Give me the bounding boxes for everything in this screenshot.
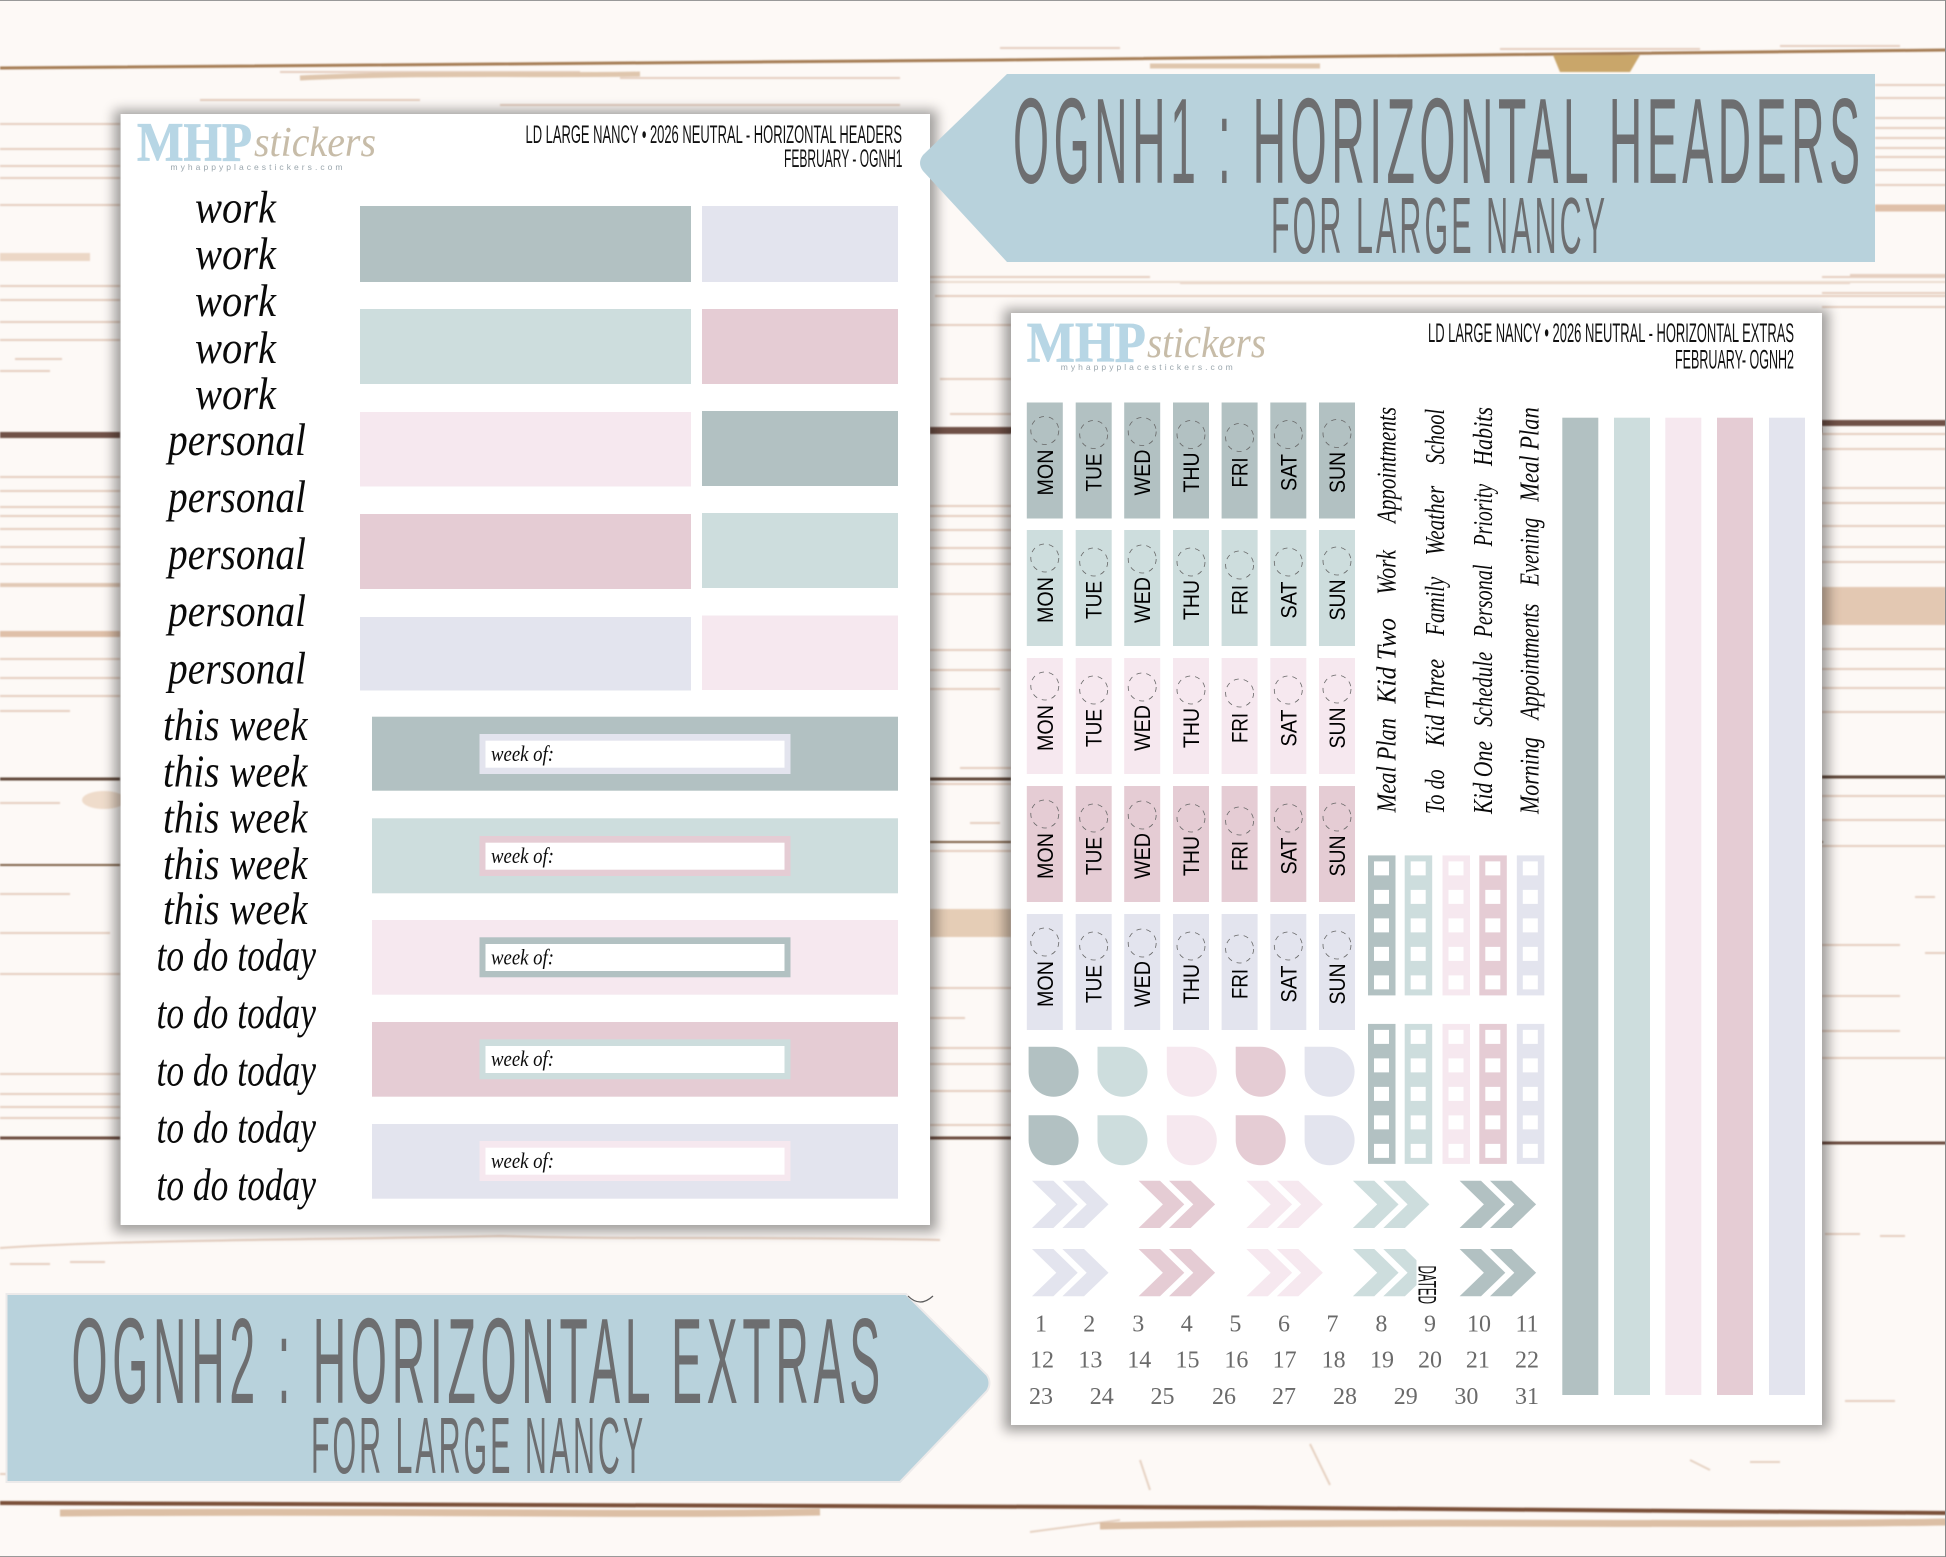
rotated script word labels: Priority bbox=[1468, 484, 1498, 547]
script labels column: work bbox=[195, 228, 277, 279]
sheet shadow: left sheet bbox=[114, 110, 937, 1232]
script labels column: personal bbox=[165, 642, 306, 694]
logo: MHP stickers: MHP bbox=[1027, 311, 1146, 374]
script labels column: work bbox=[195, 275, 277, 326]
script labels column: this week bbox=[163, 699, 309, 750]
weekday tabs: sage row bbox=[1027, 402, 1355, 518]
panel: OGNH2 horizontal extras sheet bbox=[1011, 311, 1822, 1425]
rotated script word labels: Schedule bbox=[1468, 652, 1498, 727]
date numbers: 7 bbox=[1326, 1312, 1338, 1338]
weekday tabs: rose row: FRI bbox=[1228, 841, 1253, 871]
rotated script word labels: Habits bbox=[1468, 407, 1498, 467]
logo: MHP stickers: myhappyplacestickers.com bbox=[170, 162, 342, 172]
teardrop stickers bbox=[1029, 1047, 1355, 1165]
rotated script word labels: Appointments bbox=[1372, 407, 1402, 525]
logo: MHP stickers: stickers bbox=[254, 120, 376, 166]
rotated script word labels: Appointments bbox=[1515, 604, 1545, 721]
banner: OGNH2 horizontal extras: FOR LARGE NANCY bbox=[311, 1400, 643, 1490]
rotated script word labels: Personal bbox=[1468, 564, 1498, 638]
date numbers: 30 bbox=[1454, 1384, 1478, 1410]
rotated script word labels: Meal Plan bbox=[1372, 718, 1402, 813]
weekday tabs: mint row: SAT bbox=[1276, 582, 1301, 618]
weekday tabs: rose row: THU bbox=[1179, 836, 1204, 876]
week of banners: week of: bbox=[491, 741, 554, 766]
week of banners: week of: bbox=[491, 944, 554, 970]
rotated script word labels: Meal Plan bbox=[1515, 407, 1545, 503]
weekday tabs: pink row: WED bbox=[1130, 705, 1155, 751]
rotated script word labels: Morning bbox=[1515, 737, 1545, 815]
rotated script word labels: School bbox=[1420, 409, 1450, 464]
weekday tabs: pink row bbox=[1027, 658, 1355, 774]
weekday tabs: lavender row: TUE bbox=[1082, 965, 1107, 1003]
date numbers: 2 bbox=[1083, 1312, 1095, 1338]
script labels column: personal bbox=[165, 528, 306, 579]
dated tag: DATED bbox=[1412, 1266, 1440, 1304]
script labels column: personal bbox=[165, 585, 306, 636]
weekday tabs: rose row: SUN bbox=[1325, 836, 1350, 876]
date numbers: 14 bbox=[1127, 1348, 1151, 1374]
date numbers: 5 bbox=[1229, 1312, 1241, 1338]
weekday tabs: pink row: SAT bbox=[1276, 710, 1301, 746]
script labels column: to do today bbox=[156, 1159, 316, 1210]
date numbers: 13 bbox=[1078, 1348, 1102, 1374]
sheet heading text: LD LARGE NANCY • 2026 NEUTRAL - HORIZONTAL HEADERS bbox=[526, 121, 902, 149]
weekday tabs: sage row: SUN bbox=[1325, 452, 1350, 493]
weekday tabs: lavender row: MON bbox=[1033, 961, 1058, 1007]
date numbers: 8 bbox=[1375, 1312, 1387, 1338]
date numbers: 25 bbox=[1150, 1384, 1174, 1410]
rotated script word labels: Kid One bbox=[1468, 741, 1498, 815]
weekday tabs: mint row: FRI bbox=[1228, 585, 1253, 615]
date numbers: 18 bbox=[1322, 1348, 1346, 1374]
weekday tabs: lavender row: SAT bbox=[1276, 966, 1301, 1002]
logo: MHP stickers: MHP bbox=[137, 112, 252, 172]
rotated script word labels: Weather bbox=[1420, 485, 1450, 555]
script labels column: this week bbox=[163, 792, 309, 842]
date numbers: 6 bbox=[1278, 1312, 1290, 1338]
date numbers: 11 bbox=[1515, 1312, 1539, 1338]
date numbers: 16 bbox=[1224, 1348, 1248, 1374]
script labels column: to do today bbox=[156, 1102, 316, 1152]
weekday tabs: mint row: SUN bbox=[1325, 580, 1350, 620]
banner: OGNH2 horizontal extras: OGNH2 : HORIZONTAL EXTRAS bbox=[72, 1292, 880, 1429]
script labels column: to do today bbox=[156, 987, 316, 1038]
date numbers: 3 bbox=[1132, 1312, 1144, 1338]
script labels column: this week bbox=[163, 746, 309, 796]
date numbers: 29 bbox=[1394, 1384, 1418, 1410]
script labels column: work bbox=[195, 322, 277, 373]
date numbers: 15 bbox=[1176, 1348, 1200, 1374]
week of banners bbox=[372, 717, 898, 1199]
date numbers: 20 bbox=[1418, 1348, 1442, 1374]
long vertical colour strips bbox=[1562, 418, 1805, 1395]
sheet shadow: right sheet bbox=[1004, 309, 1829, 1431]
panel: OGNH2 horizontal extras sheet: FEBRUARY- OGNH2 bbox=[1675, 344, 1794, 374]
date numbers: 28 bbox=[1333, 1384, 1357, 1410]
date numbers: 24 bbox=[1090, 1384, 1114, 1410]
weekday tabs: mint row: MON bbox=[1033, 577, 1058, 623]
logo: MHP stickers bbox=[1027, 311, 1266, 374]
panel: OGNH1 horizontal headers sheet: FEBRUARY - OGNH1 bbox=[784, 145, 902, 173]
week of banners: week of: bbox=[491, 1148, 554, 1173]
weekday tabs: lavender row: SUN bbox=[1325, 964, 1350, 1004]
date numbers: 1 bbox=[1035, 1312, 1047, 1338]
sheet heading text bbox=[1428, 318, 1794, 374]
date numbers: 9 bbox=[1424, 1312, 1436, 1338]
script labels column: work bbox=[195, 368, 277, 419]
weekday tabs: sage row: THU bbox=[1179, 452, 1204, 492]
weekday tabs: rose row: MON bbox=[1033, 833, 1058, 879]
dated tag bbox=[1412, 1249, 1440, 1307]
date numbers: 22 bbox=[1515, 1348, 1539, 1374]
weekday tabs: pink row: SUN bbox=[1325, 708, 1350, 748]
date numbers: 31 bbox=[1515, 1384, 1539, 1410]
rotated script word labels bbox=[1372, 407, 1545, 815]
script labels column: personal bbox=[165, 471, 306, 522]
date numbers: 10 bbox=[1467, 1312, 1491, 1338]
weekday tabs: lavender row: THU bbox=[1179, 964, 1204, 1004]
panel: OGNH1 horizontal headers sheet bbox=[121, 112, 930, 1225]
date numbers: 12 bbox=[1030, 1348, 1054, 1374]
date numbers: 4 bbox=[1181, 1312, 1193, 1338]
date numbers: 27 bbox=[1272, 1384, 1296, 1410]
weekday tabs: sage row: FRI bbox=[1228, 458, 1253, 488]
logo: MHP stickers bbox=[137, 112, 376, 172]
habit tracker strips: top set bbox=[1368, 855, 1544, 995]
script labels column: personal bbox=[165, 414, 306, 465]
weekday tabs: rose row: SAT bbox=[1276, 838, 1301, 874]
weekday tabs: sage row: TUE bbox=[1082, 454, 1107, 492]
habit tracker strips: bottom set bbox=[1368, 1024, 1544, 1164]
week of banners: week of: bbox=[491, 843, 554, 868]
banner: OGNH1 horizontal headers: OGNH1 : HORIZONTAL HEADERS bbox=[1013, 72, 1860, 209]
script labels column: work bbox=[195, 182, 277, 232]
date numbers: 17 bbox=[1273, 1348, 1297, 1374]
weekday tabs: sage row: WED bbox=[1130, 450, 1155, 496]
weekday tabs: rose row bbox=[1027, 786, 1355, 902]
script labels column: this week bbox=[163, 838, 309, 889]
weekday tabs: pink row: THU bbox=[1179, 708, 1204, 748]
banner: OGNH1 horizontal headers: FOR LARGE NANCY bbox=[1271, 180, 1605, 270]
weekday tabs: mint row: WED bbox=[1130, 577, 1155, 623]
weekday tabs: mint row bbox=[1027, 530, 1355, 646]
rotated script word labels: Kid Three bbox=[1420, 659, 1450, 747]
weekday tabs: pink row: MON bbox=[1033, 705, 1058, 751]
script labels column: to do today bbox=[156, 930, 316, 980]
weekday tabs: rose row: WED bbox=[1130, 833, 1155, 879]
rotated script word labels: To do bbox=[1420, 769, 1450, 814]
rotated script word labels: Evening bbox=[1515, 518, 1545, 586]
weekday tabs: sage row: MON bbox=[1033, 450, 1058, 496]
weekday tabs: sage row: SAT bbox=[1276, 454, 1301, 491]
rotated script word labels: Kid Two bbox=[1372, 618, 1402, 705]
weekday tabs: lavender row: FRI bbox=[1228, 969, 1253, 999]
sheet heading text bbox=[526, 121, 902, 173]
banner: OGNH2 horizontal extras bbox=[6, 1292, 990, 1490]
banner: OGNH1 horizontal headers bbox=[920, 72, 1875, 270]
colour header blocks bbox=[360, 206, 898, 690]
date numbers: 26 bbox=[1212, 1384, 1236, 1410]
date numbers bbox=[1029, 1312, 1539, 1410]
weekday tabs: lavender row: WED bbox=[1130, 961, 1155, 1007]
weekday tabs: pink row: FRI bbox=[1228, 713, 1253, 743]
weekday tabs: mint row: THU bbox=[1179, 580, 1204, 620]
logo: MHP stickers: myhappyplacestickers.com bbox=[1061, 362, 1233, 372]
small arc mark at banner corner bbox=[908, 1296, 933, 1302]
weekday tabs: lavender row bbox=[1027, 914, 1355, 1030]
weekday tabs: mint row: TUE bbox=[1082, 581, 1107, 619]
script labels column: to do today bbox=[156, 1044, 316, 1096]
weekday tabs: rose row: TUE bbox=[1082, 837, 1107, 875]
rotated script word labels: Family bbox=[1420, 577, 1450, 636]
weekday tabs: pink row: TUE bbox=[1082, 709, 1107, 747]
date numbers: 21 bbox=[1466, 1348, 1490, 1374]
date numbers: 19 bbox=[1370, 1348, 1394, 1374]
script labels column bbox=[156, 182, 316, 1210]
script labels column: this week bbox=[163, 883, 309, 934]
double chevron arrows bbox=[1032, 1181, 1536, 1296]
date numbers: 23 bbox=[1029, 1384, 1053, 1410]
week of banners: week of: bbox=[491, 1046, 554, 1071]
logo: MHP stickers: stickers bbox=[1147, 320, 1266, 367]
rotated script word labels: Work bbox=[1372, 549, 1402, 595]
